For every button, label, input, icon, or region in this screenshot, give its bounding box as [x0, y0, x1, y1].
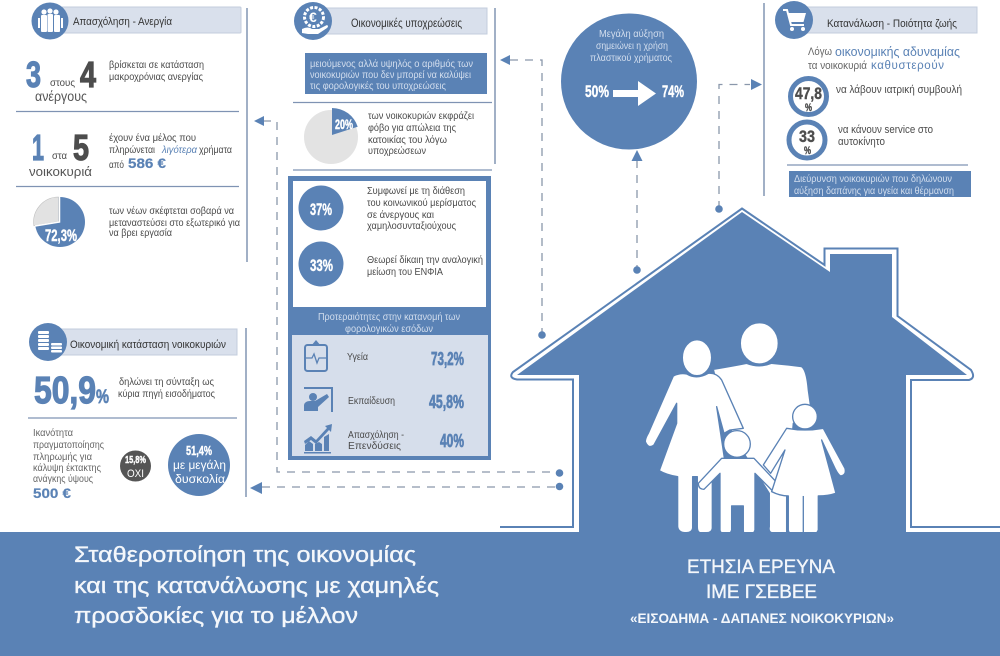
- text: fear of losing home: υποχρεώσεων: [368, 145, 426, 157]
- girl: [763, 428, 845, 534]
- row: health 73.2%: [347, 349, 464, 369]
- icon: health clipboard: [305, 340, 327, 371]
- stat: 3 of 4 unemployed: 4: [80, 54, 96, 95]
- stat ring: 33%: 33: [799, 127, 815, 146]
- text: youth considering emigration: [109, 205, 240, 239]
- family figures: [645, 323, 845, 534]
- text: ability to pay emergency need: Ικανότητα: [33, 427, 73, 439]
- arrow: increase from 50% to 74%: [613, 81, 656, 106]
- stat ring: 33%: %: [804, 145, 811, 157]
- text: pension as main income: κύρια πηγή εισοδήματος: [118, 388, 215, 400]
- panel: household finances: [28, 323, 246, 501]
- arrow: to plastic money circle: [632, 150, 642, 274]
- stat: 1 in 5 households: [29, 127, 92, 179]
- badge: 15.8% no: 15,8%: [125, 455, 146, 466]
- father: [713, 363, 811, 533]
- icon: euro gear in hand: [294, 2, 332, 40]
- text: ability to pay emergency need: πληρωμής για: [33, 451, 92, 463]
- heading: households delay due to financial weakness: καθυστερούν: [871, 60, 944, 72]
- headline: stabilisation of the economy: Σταθεροποίηση της οικονομίας: [74, 542, 416, 567]
- stat: 1 in 5 households: 5: [73, 127, 89, 168]
- text: social dividend: σε άνεργους και: [367, 209, 435, 221]
- stat: 1 in 5 households: στα: [52, 150, 67, 162]
- callout: households unable to meet tax obligations: τις φορολογικές του υποχρεώσεις: [310, 80, 446, 92]
- stat: 50.9%: 50,9: [34, 370, 96, 412]
- callout: rising health and heating spending: αύξηση δαπάνης για υγεία και θέρμανση: [794, 185, 954, 197]
- stat: 1 in 5 households: 1: [32, 127, 44, 168]
- pie chart: 72.3%: 72,3%: [45, 226, 77, 245]
- text: ability to pay emergency need: πραγματοποίησης: [33, 439, 104, 451]
- text: low-paid household member: πληρώνεται: [109, 144, 156, 156]
- text: youth considering emigration: των νέων σκέφτεται σοβαρά να: [109, 205, 234, 217]
- callout: households unable to meet tax obligations: μειούμενος αλλά υψηλός ο αριθμός των: [310, 58, 473, 70]
- mother: [645, 373, 743, 533]
- panel: financial obligations: [293, 2, 495, 170]
- text: long-term unemployment: μακροχρόνιας ανεργίας: [109, 71, 203, 83]
- text: fear of losing home: [368, 110, 475, 157]
- arrow: to household finances panel: [250, 482, 563, 494]
- arrow: to employment panel: [254, 116, 563, 477]
- callout circle: plastic money use: [561, 14, 697, 150]
- stat: 3 of 4 unemployed: στους: [50, 77, 75, 89]
- arrow: to consumption panel: [715, 79, 762, 213]
- boy: [698, 458, 776, 534]
- badge: 51.4% great difficulty: δυσκολία: [175, 472, 225, 486]
- text: medical advice: να λάβουν ιατρική συμβουλή: [836, 84, 962, 96]
- text: low-paid household member: [109, 132, 232, 171]
- survey title: ΕΤΗΣΙΑ ΕΡΕΥΝΑ: [687, 557, 835, 578]
- row: employment and investment 40%: 40%: [440, 431, 464, 451]
- icon: stacks of coins: [29, 323, 67, 361]
- stat: 37%: [298, 186, 344, 230]
- icon: group of workers: [32, 2, 68, 40]
- heading: households delay due to financial weakness: [808, 44, 960, 72]
- text: property tax reduction: [367, 254, 483, 278]
- text: property tax reduction: μείωση του ΕΝΦΙΑ: [367, 266, 443, 278]
- pie chart: 72.3%: [34, 197, 85, 247]
- heading: households delay due to financial weakness: Λόγω: [808, 46, 832, 58]
- heading bar: obligations: [322, 8, 487, 34]
- text: ability to pay emergency need: 500 €: [33, 485, 71, 501]
- arrow: to obligations panel: [500, 55, 546, 339]
- text: car service: να κάνουν service στο: [838, 124, 933, 136]
- heading: households delay due to financial weakness: οικονομικής αδυναμίας: [835, 44, 960, 59]
- house illustration with family: [500, 208, 1000, 534]
- text: fear of losing home: των νοικοκυριών εκφράζει: [368, 110, 475, 122]
- icon: euro gear in hand: €: [309, 9, 317, 25]
- heading bar: employment: [60, 7, 241, 33]
- panel: tax policy opinions and priorities: [288, 176, 491, 460]
- badge: 51.4% great difficulty: 51,4%: [186, 443, 212, 458]
- row: employment and investment 40%: Απασχόληση -: [348, 429, 404, 441]
- text: social dividend: Συμφωνεί με τη διάθεση: [367, 185, 465, 197]
- heading bar: consumption: [790, 7, 977, 33]
- stat: 33%: [298, 242, 344, 286]
- text: ability to pay emergency need: ανάγκης ύψους: [33, 473, 93, 485]
- text: property tax reduction: Θεωρεί δίκαιη την αναλογική: [367, 254, 483, 266]
- icon: teacher at board: [304, 387, 333, 412]
- callout: rising health and heating spending: [789, 171, 971, 197]
- heading bar: household finances: Οικονομική κατάσταση νοικοκυριών: [70, 339, 226, 351]
- row: health 73.2%: 73,2%: [431, 349, 464, 369]
- stat ring: 47.8%: [790, 78, 826, 114]
- callout: rising health and heating spending: Διεύρυνση νοικοκυριών που δηλώνουν: [794, 173, 952, 185]
- panel: consumption and quality of life: [764, 1, 977, 197]
- row: education 45.8%: Εκπαίδευση: [348, 395, 395, 407]
- badge: 15.8% no: ΟΧΙ: [127, 468, 144, 480]
- stat ring: 47.8%: %: [805, 102, 812, 114]
- row: education 45.8%: 45,8%: [429, 392, 464, 412]
- text: low-paid household member: από: [109, 159, 124, 171]
- stat: 1 in 5 households: νοικοκυριά: [29, 164, 92, 179]
- callout circle: plastic money use: σημειώνει η χρήση: [596, 40, 668, 52]
- stat: 37%: 37%: [310, 200, 332, 219]
- row: education 45.8%: [348, 392, 464, 412]
- text: pension as main income: [118, 376, 215, 400]
- text: social dividend: χαμηλοσυνταξιούχους: [367, 220, 456, 232]
- badge: 51.4% great difficulty: με μεγάλη: [173, 458, 226, 472]
- survey title: ΙΜΕ ΓΣΕΒΕΕ: [706, 582, 817, 603]
- text: ability to pay emergency need: κάλυψη έκτακτης: [33, 462, 101, 474]
- stat ring: 33%: [789, 122, 825, 158]
- row: employment and investment 40%: [348, 429, 464, 452]
- survey title: [630, 557, 894, 626]
- heading bar: employment: Απασχόληση - Ανεργία: [73, 16, 173, 28]
- stat: 33%: 33%: [310, 256, 333, 275]
- callout circle: plastic money use: 50%: [585, 82, 609, 101]
- text: low-paid household member: χρήματα: [199, 144, 232, 156]
- badge: 15.8% no: [120, 450, 151, 482]
- text: pension as main income: δηλώνει τη σύνταξη ως: [119, 376, 214, 388]
- callout: households unable to meet tax obligations: [305, 53, 487, 94]
- text: long-term unemployment: [109, 59, 204, 83]
- headline: stabilisation of the economy: και της κατανάλωσης με χαμηλές: [74, 573, 439, 598]
- pie chart: 20%: 20%: [335, 116, 353, 132]
- headline: stabilisation of the economy: [74, 542, 439, 628]
- footer band: [0, 532, 1000, 656]
- callout circle: plastic money use: Μεγάλη αύξηση: [599, 28, 664, 40]
- panel: employment and unemployment: [16, 2, 247, 262]
- text: fear of losing home: κατοικίας του λόγω: [368, 134, 447, 146]
- stat: 3 of 4 unemployed: ανέργους: [35, 89, 87, 104]
- heading: tax revenue priorities: φορολογικών εσόδων: [345, 323, 433, 335]
- stat: 3 of 4 unemployed: [26, 54, 96, 104]
- heading: households delay due to financial weakness: τα νοικοκυριά: [808, 60, 868, 72]
- callout circle: plastic money use: πλαστικού χρήματος: [590, 52, 672, 64]
- callout: households unable to meet tax obligations: νοικοκυριών που δεν μπορεί να καλύψει: [310, 69, 472, 81]
- text: low-paid household member: 586 €: [128, 155, 166, 171]
- text: ability to pay emergency need: [33, 427, 104, 501]
- text: low-paid household member: έχουν ένα μέλος που: [109, 132, 196, 144]
- heading bar: obligations: Οικονομικές υποχρεώσεις: [351, 18, 462, 30]
- heading: tax revenue priorities: Προτεραιότητες στην κατανομή των: [318, 311, 460, 323]
- heading bar: consumption: Κατανάλωση - Ποιότητα ζωής: [827, 18, 957, 30]
- pie chart: 20%: [304, 108, 358, 164]
- text: social dividend: [367, 185, 476, 232]
- row: health 73.2%: Υγεία: [347, 351, 368, 363]
- stat: 3 of 4 unemployed: 3: [26, 54, 41, 95]
- icon: growth chart: [304, 424, 332, 454]
- stat ring: 47.8%: 47,8: [795, 84, 822, 103]
- heading: tax revenue priorities: [318, 311, 460, 335]
- row: employment and investment 40%: Επενδύσεις: [348, 440, 401, 452]
- text: social dividend: του κοινωνικού μερίσματος: [367, 197, 476, 209]
- icon: shopping cart: [775, 1, 813, 39]
- callout circle: plastic money use: 74%: [662, 82, 684, 101]
- badge: 51.4% great difficulty: [168, 434, 230, 496]
- headline: stabilisation of the economy: προσδοκίες για το μέλλον: [74, 603, 358, 628]
- text: car service: [838, 124, 933, 148]
- heading bar: household finances: [55, 329, 237, 355]
- survey title: «ΕΙΣΟΔΗΜΑ - ΔΑΠΑΝΕΣ ΝΟΙΚΟΚΥΡΙΩΝ»: [630, 611, 894, 626]
- text: car service: αυτοκίνητο: [838, 136, 885, 148]
- text: low-paid household member: λιγότερα: [161, 144, 198, 156]
- text: youth considering emigration: να βρει εργασία: [109, 227, 172, 239]
- text: youth considering emigration: μεταναστεύσει στο εξωτερικό για: [109, 217, 240, 229]
- stat: 50.9%: %: [96, 387, 109, 408]
- text: fear of losing home: φόβο για απώλεια της: [368, 122, 456, 134]
- text: long-term unemployment: βρίσκεται σε κατάσταση: [109, 59, 204, 71]
